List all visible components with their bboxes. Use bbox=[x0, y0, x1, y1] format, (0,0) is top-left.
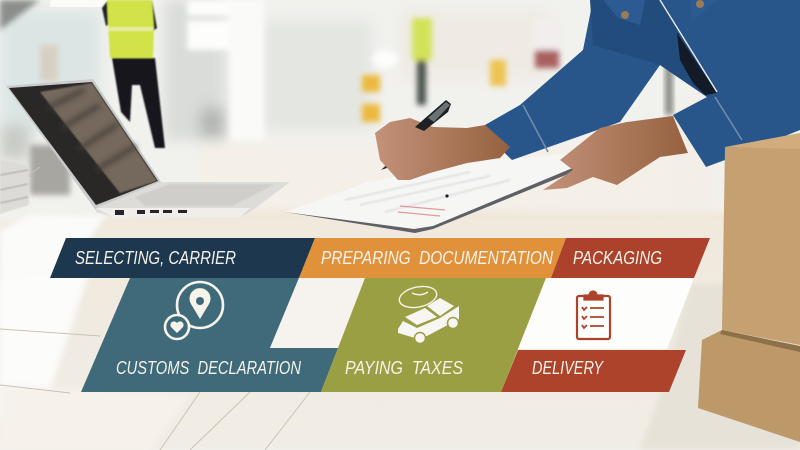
table and floor surface bbox=[0, 167, 800, 450]
background workers and signs bbox=[102, 0, 560, 148]
panel: preparing documentation: PREPARING DOCUMENTATION bbox=[321, 248, 554, 268]
document clipboard bbox=[285, 153, 590, 233]
panel: paying taxes: PAYING TAXES bbox=[345, 358, 463, 378]
panel: selecting carrier: SELECTING, CARRIER bbox=[75, 248, 236, 268]
panel: delivery bbox=[501, 350, 686, 392]
panel: selecting carrier bbox=[50, 238, 315, 278]
panel: customs declaration bbox=[81, 278, 338, 392]
panel: delivery: DELIVERY bbox=[532, 358, 605, 378]
infographic banner bbox=[50, 238, 710, 392]
denim jacket and sleeves bbox=[485, 0, 800, 167]
panel: packaging bbox=[551, 238, 710, 278]
hands holding pen bbox=[375, 100, 688, 190]
cardboard boxes bbox=[698, 133, 800, 442]
icon: delivery van bbox=[397, 283, 459, 344]
panel: blank white bbox=[270, 278, 365, 348]
panel: customs declaration: CUSTOMS DECLARATION bbox=[116, 358, 302, 378]
panel: preparing documentation bbox=[299, 238, 566, 278]
panel: clipboard white bbox=[518, 278, 694, 349]
stacked papers at left bbox=[0, 160, 29, 214]
panel: packaging: PACKAGING bbox=[573, 248, 662, 268]
icon: checklist clipboard bbox=[577, 291, 610, 339]
icon: location pin with badge bbox=[165, 282, 223, 339]
laptop bbox=[6, 79, 290, 217]
panel: paying taxes bbox=[321, 278, 546, 392]
